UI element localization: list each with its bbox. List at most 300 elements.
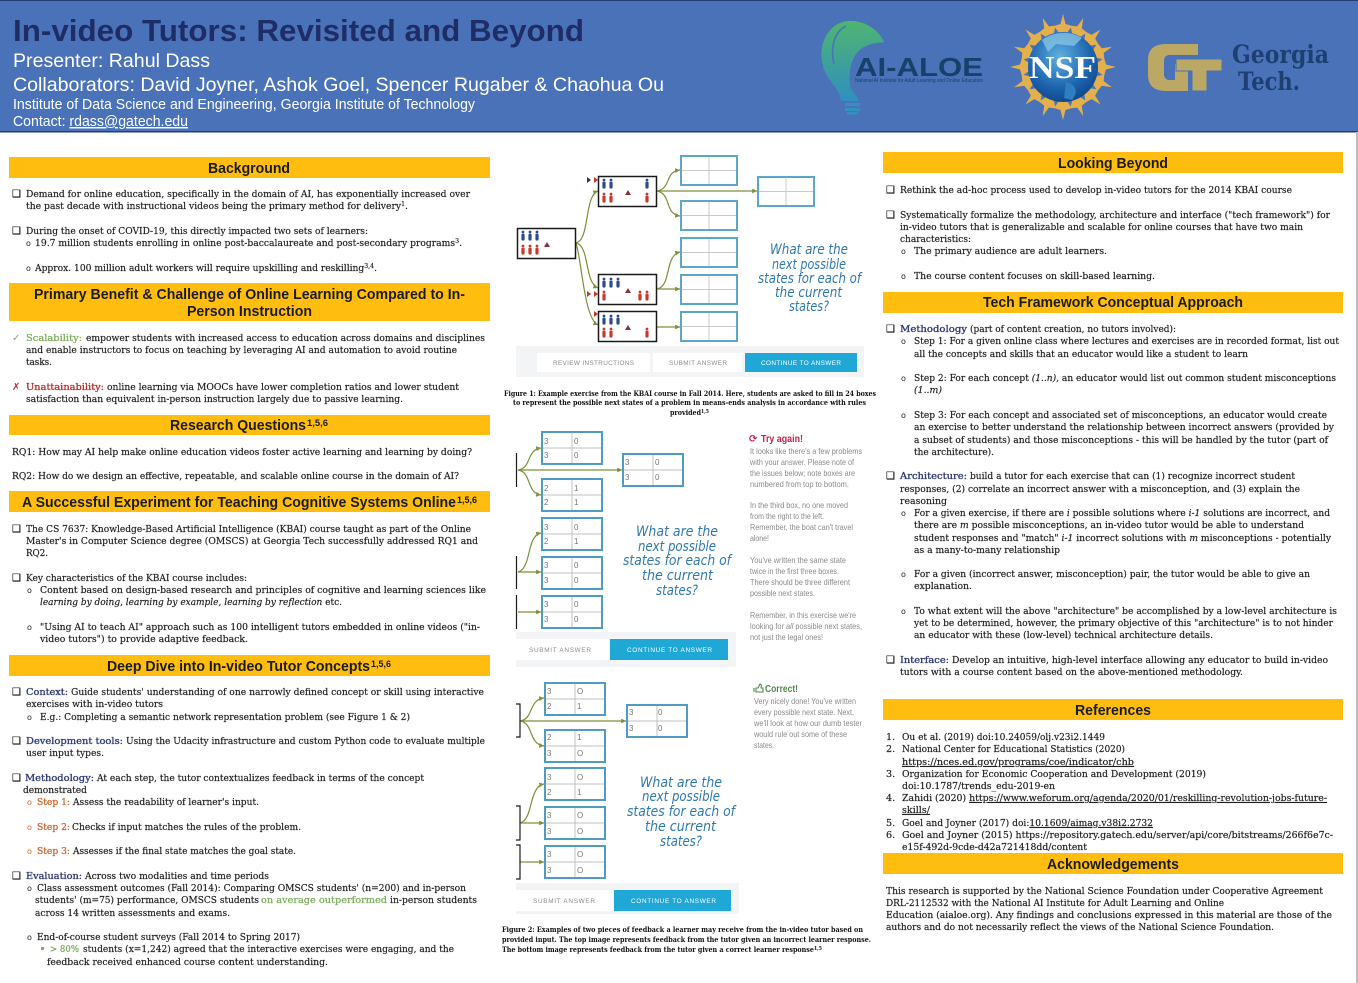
text: background bullets: ❑	[12, 189, 21, 200]
figure 1: KBAI exercise	[504, 156, 876, 417]
heading: research questions	[9, 415, 490, 435]
text: KBAI course: learning by doing, learning by example, learning by reflection etc.	[40, 597, 342, 608]
feedback: try again	[749, 434, 862, 642]
answer boxes with values: 3	[547, 687, 552, 696]
text: architecture: yet to be determined, however, the primary objective of this "architecture" is to not hinder	[913, 618, 1333, 629]
text: references list: Goel and Joyner (2017) doi:10.1609/aimag.v38i2.2732	[902, 818, 1153, 829]
text: methodology: Step 3: For each concept and associated set of misconceptions, an educator would create	[914, 410, 1327, 421]
answer boxes with values: 3	[544, 576, 549, 585]
text: architecture: an educator with these (low-level) technical architecture details.	[914, 630, 1213, 641]
text: methodology: Step 1: For a given online class where lectures and exercises are in recorded format, list out	[914, 336, 1339, 347]
text: looking beyond bullets: characteristics:	[900, 234, 971, 245]
text: references list: skills/	[902, 805, 931, 816]
text: looking beyond bullets: in-video tutors that is generalizable and scalable for online courses that have two main	[900, 222, 1303, 233]
text: methodology: Checks if input matches the rules of the problem.	[72, 822, 301, 833]
text: methodology: ❑	[886, 324, 895, 335]
text: KBAI course: o	[27, 586, 32, 595]
text: context: E.g.: Completing a semantic network representation problem (see Figure 1 & 2)	[40, 712, 410, 723]
text: context: exercises with in-video tutors	[26, 699, 163, 710]
caption: figure 2	[502, 925, 871, 954]
text: scalability: ✓	[12, 333, 20, 344]
handwritten question: the current	[645, 819, 716, 835]
feedback: try again: It looks like there's a few problems	[750, 446, 862, 456]
caption: figure 2: provided input. The top image represents feedback from the tutor given an incorrect learner response.	[502, 935, 871, 944]
text: looking beyond bullets: The primary audience are adult learners.	[914, 246, 1107, 257]
button bar	[516, 632, 736, 667]
feedback: correct: we'll look at how our dumb tester	[753, 718, 862, 728]
handwritten question	[623, 524, 733, 599]
heading: Background	[9, 157, 490, 178]
panel: center figures	[502, 156, 876, 954]
text: architecture: Architecture:	[899, 471, 967, 482]
text: methodology: o	[27, 823, 32, 832]
feedback: correct: Very nicely done! You've written	[754, 696, 856, 706]
logo: Georgia Tech: Tech.	[1238, 67, 1300, 96]
text: architecture: For a given (incorrect answer, misconception) pair, the tutor would be able to give an	[914, 569, 1310, 580]
answer boxes with values: O	[577, 850, 583, 859]
text: KBAI course: Master's in Computer Science degree (OMSCS) at Georgia Tech successfully addressed RQ1 and	[26, 536, 478, 547]
handwritten question: states?	[660, 834, 702, 850]
figure 2: incorrect feedback	[516, 432, 862, 667]
text: methodology: Methodology:	[25, 773, 94, 784]
text: context: o	[27, 713, 32, 722]
text: architecture: reasoning	[900, 496, 947, 507]
answer boxes with values: 3	[544, 437, 549, 446]
feedback: try again: alone!	[750, 533, 769, 543]
answer boxes with values: 3	[544, 561, 549, 570]
feedback: try again: from the right to the left.	[750, 511, 824, 521]
feedback: try again: looking for all possible next states,	[750, 621, 862, 631]
logo: AI-ALOE: National AI Institute for Adult Learning and Online Education	[855, 78, 983, 84]
heading: deep dive	[9, 655, 490, 676]
answer boxes with values: 2	[544, 484, 549, 493]
text: background bullets: 19.7 million students enrolling in online post-baccalaureate and post-secondary programs	[35, 238, 473, 249]
answer boxes with values: O	[577, 687, 583, 696]
text: KBAI course: o	[27, 623, 32, 632]
text: methodology: o	[27, 847, 32, 856]
answer boxes with values: 0	[574, 437, 579, 446]
answer boxes with values	[545, 683, 687, 878]
answer boxes with values: O	[577, 866, 583, 875]
answer boxes with values: 0	[574, 600, 579, 609]
text: architecture: there are m possible misconceptions, an in-video tutor would be able to understand	[914, 520, 1304, 531]
feedback: try again: twice in the first three boxes.	[750, 566, 839, 576]
logo: AI-ALOE: AI-ALOE	[855, 52, 983, 82]
arrows: figure 1 state connections	[576, 170, 757, 327]
heading: Background: Background	[208, 160, 290, 177]
logo: NSF: NSF	[1029, 49, 1096, 85]
answer boxes with values: 1	[577, 788, 582, 797]
feedback: try again: numbered from top to bottom.	[750, 479, 849, 489]
heading: successful experiment: A Successful Experiment for Teaching Cognitive Systems Online	[22, 494, 456, 511]
answer boxes with values: 1	[574, 484, 579, 493]
answer boxes with values: 3	[547, 866, 552, 875]
text: unattainability: ✗	[12, 382, 20, 393]
text: references list: https://nces.ed.gov/programs/coe/indicator/chb	[902, 757, 1134, 768]
text: scalability: and enable instructors to focus on teaching by leveraging AI and automation to avoid routine	[26, 345, 457, 356]
answer boxes with values: 3	[544, 451, 549, 460]
text: looking beyond bullets: o	[901, 272, 906, 281]
text: KBAI course: Content based on design-based research and principles of cognitive and learning sciences like	[40, 585, 486, 596]
text: references list: 6.	[886, 830, 895, 841]
text: looking beyond bullets: Systematically formalize the methodology, architecture and interface ("tech framework") for	[900, 210, 1330, 221]
text: acknowledgements: authors and do not necessarily reflect the views of the National Science Foundation.	[886, 922, 1274, 933]
answer boxes with values: 2	[547, 733, 552, 742]
text: looking beyond bullets: o	[901, 247, 906, 256]
logo: Georgia Tech: Georgia	[1232, 40, 1329, 69]
text: interface: Interface:	[900, 655, 949, 666]
text: architecture: o	[901, 607, 906, 616]
text: references list: 2.	[886, 744, 895, 755]
text: methodology: Step 2: For each concept (1..n), an educator would list out common student misconceptions	[914, 373, 1336, 384]
feedback: try again: the issues below; note boxes are	[750, 468, 855, 478]
text: methodology: o	[27, 798, 32, 807]
people and boat icons	[521, 177, 649, 338]
caption: figure 1: Figure 1: Example exercise from the KBAI course in Fall 2014. Here, students are asked to fill in 24 boxes	[504, 389, 876, 398]
handwritten question: What are the	[636, 524, 718, 540]
state brackets	[516, 704, 520, 879]
text: background bullets: During the onset of COVID-19, this directly impacted two sets of learners:	[26, 226, 368, 237]
handwritten question: the current	[642, 568, 713, 584]
institute: Institute of Data Science and Engineering, Georgia Institute of Technology	[13, 97, 476, 113]
feedback: try again: Try again!	[761, 434, 803, 445]
handwritten question	[627, 775, 737, 850]
text: methodology: a subset of students) and those misconceptions - this will be handled by the tutor (part of	[914, 435, 1329, 446]
heading: research questions: 1,5,6	[307, 418, 328, 428]
answer boxes with values: 3	[625, 458, 630, 467]
text: evaluation: Across two modalities and time periods	[84, 871, 269, 882]
text: references list: Ou et al. (2019) doi:10.24059/olj.v23i2.1449	[902, 732, 1105, 743]
answer boxes with values: 1	[577, 733, 582, 742]
text: development tools: ❑	[12, 736, 21, 747]
text: research questions: RQ1: How may AI help make online education videos foster active learning and learning by doing?	[12, 447, 472, 458]
feedback: correct: Correct!	[765, 684, 798, 695]
button bar: CONTINUE TO ANSWER	[761, 360, 841, 367]
text: evaluation: students' (m=75) performance, OMSCS students	[35, 895, 259, 906]
handwritten question: states for each of	[627, 804, 737, 820]
feedback: try again: Remember, the boat can't travel	[750, 522, 853, 532]
text: background bullets: 3	[455, 237, 459, 245]
text: evaluation: Class assessment outcomes (Fall 2014): Comparing OMSCS students' (n=200) and in-person	[37, 883, 466, 894]
text: looking beyond bullets	[886, 185, 1330, 282]
text: methodology: an exercise to better understand the relationship between incorrect answers (provided by	[914, 422, 1335, 433]
answer boxes with values: 0	[655, 473, 660, 482]
text: methodology: demonstrated	[23, 785, 87, 796]
text: background bullets: ❑	[12, 226, 21, 237]
header banner	[0, 0, 1358, 132]
text: background bullets: .	[374, 263, 377, 274]
text: interface: tutors with a course content based on the above-mentioned methodology.	[900, 667, 1243, 678]
handwritten question: next possible	[642, 789, 720, 805]
answer boxes with values: O	[577, 773, 583, 782]
button bar: SUBMIT ANSWER	[669, 360, 727, 367]
answer boxes with values: O	[577, 749, 583, 758]
handwritten question	[758, 242, 863, 315]
text: references list: e15f-492d-9cde-d42a721418dd/content	[902, 842, 1087, 853]
button bar	[516, 883, 739, 914]
handwritten question: the current	[775, 285, 842, 301]
text: looking beyond bullets: The course content focuses on skill-based learning.	[914, 271, 1155, 282]
text: context: ❑	[12, 687, 21, 698]
text: methodology: Assesses if the final state matches the goal state.	[72, 846, 296, 857]
text: acknowledgements	[886, 886, 1332, 933]
handwritten question: What are the	[640, 775, 722, 791]
text: unattainability: online learning via MOOCs have lower completion ratios and lower student	[107, 382, 459, 393]
heading: deep dive: Deep Dive into In-video Tutor Concepts	[107, 658, 370, 675]
heading: references	[883, 699, 1343, 720]
heading: primary benefit and challenge: Person Instruction	[187, 303, 312, 320]
text: background bullets: o	[26, 239, 31, 248]
text: KBAI course	[12, 524, 486, 645]
heading: looking beyond	[883, 152, 1343, 173]
text: acknowledgements: This research is supported by the National Science Foundation under Cooperative Agreement	[886, 886, 1323, 897]
text: methodology: Step 1:	[37, 797, 70, 808]
text: looking beyond bullets: ❑	[886, 210, 895, 221]
answer boxes with values: O	[577, 811, 583, 820]
text: scalability: empower students with increased access to education across domains and disciplines	[86, 333, 485, 344]
text: methodology: o	[901, 411, 906, 420]
text: architecture	[886, 471, 1337, 641]
text: background bullets: Approx. 100 million adult workers will require upskilling and reskilling	[35, 263, 381, 274]
text: KBAI course: video tutors") to provide adaptive feedback.	[39, 634, 248, 645]
panel: right column	[883, 152, 1343, 933]
text: background bullets: 3,4	[364, 262, 374, 270]
heading: tech framework	[883, 292, 1343, 313]
caption: figure 1: provided	[670, 408, 707, 417]
answer boxes with values: 0	[655, 458, 660, 467]
text: evaluation: feedback received enhanced course content understanding.	[47, 957, 328, 968]
text: methodology: Assess the readability of learner's input.	[72, 797, 259, 808]
answer boxes with values: 0	[658, 724, 663, 733]
presenter: Presenter: Rahul Dass	[13, 50, 210, 72]
handwritten question: states?	[789, 299, 829, 315]
text: interface: Develop an intuitive, high-level interface allowing any educator to build in-video	[952, 655, 1328, 666]
text: development tools: Using the Udacity infrastructure and custom Python code to evaluate multiple	[126, 736, 485, 747]
state boxes	[518, 176, 656, 342]
text: development tools: user input types.	[26, 748, 104, 759]
text: KBAI course: ❑	[12, 524, 21, 535]
feedback: correct	[753, 684, 862, 750]
heading: acknowledgements: Acknowledgements	[1047, 856, 1179, 873]
text: research questions	[12, 447, 472, 482]
heading: successful experiment: 1,5,6	[457, 495, 477, 505]
text: references list: 4.	[886, 793, 895, 804]
feedback: correct: would rule out some of these	[753, 729, 847, 739]
heading: acknowledgements	[883, 853, 1343, 874]
state stubs	[516, 453, 518, 629]
text: architecture: student responses and "match" i-1 incorrect solutions with m misconceptions - potentially	[914, 533, 1332, 544]
answer boxes with values: 3	[547, 749, 552, 758]
text: evaluation: ❑	[12, 871, 21, 882]
text: references list: National Center for Educational Statistics (2020)	[902, 744, 1125, 755]
handwritten question: states for each of	[623, 553, 733, 569]
text: architecture: To what extent will the above "architecture" be accomplished by a low-level architecture is	[914, 606, 1337, 617]
feedback: try again: Remember, in this exercise we're	[750, 610, 856, 620]
logo: AI-ALOE	[821, 21, 983, 114]
text: architecture: build a tutor for each exercise that can (1) recognize incorrect student	[970, 471, 1295, 482]
text: architecture: For a given exercise, if there are i possible solutions where i-1 solutions are incorrect, and	[914, 508, 1330, 519]
text: unattainability	[12, 382, 459, 405]
text: KBAI course: ❑	[12, 573, 21, 584]
text: unattainability: satisfaction than equivalent in-person instruction largely due to passive learning.	[26, 394, 403, 405]
text: research questions: RQ2: How do we design an effective, repeatable, and scalable online course in the domain of AI?	[12, 471, 459, 482]
text: development tools: Development tools:	[26, 736, 123, 747]
answer boxes with values: 3	[547, 773, 552, 782]
text: KBAI course: "Using AI to teach AI" approach such as 100 intelligent tutors embedded in online videos ("in-	[40, 622, 480, 633]
text: background bullets: the past decade with instructional videos being the primary method for delivery	[26, 201, 416, 212]
collaborators: Collaborators: David Joyner, Ashok Goel, Spencer Rugaber & Chaohua Ou	[13, 74, 664, 96]
logo: Georgia Tech	[1148, 40, 1329, 96]
caption: figure 1	[504, 389, 876, 417]
heading: references: References	[1075, 702, 1151, 719]
handwritten question: states?	[656, 583, 698, 599]
text: evaluation: on average outperformed	[261, 895, 387, 906]
answer boxes with values: 3	[547, 811, 552, 820]
text: methodology: ❑	[12, 773, 21, 784]
text: methodology: (part of content creation, no tutors involved):	[970, 324, 1176, 335]
text: evaluation: Evaluation:	[26, 871, 82, 882]
text: unattainability: Unattainability:	[26, 382, 104, 393]
answer boxes with values: 3	[544, 615, 549, 624]
text: evaluation: across 14 written assessments and exams.	[35, 908, 230, 919]
text: scalability: tasks.	[26, 357, 52, 368]
handwritten question: What are the	[770, 242, 848, 258]
text: methodology: all the concepts and skills that an educator would like a student to learn	[914, 349, 1248, 360]
caption: figure 1: to represent the possible next states of a problem in means-ends analysis in accordance with rules	[513, 398, 866, 407]
text: evaluation: o	[27, 933, 32, 942]
text: background bullets: o	[26, 264, 31, 273]
answer boxes with values: 1	[574, 498, 579, 507]
feedback: try again: not just the legal ones!	[750, 632, 823, 642]
title: In-video Tutors: Revisited and Beyond	[13, 13, 584, 48]
text: references list: 1.	[886, 732, 895, 743]
text: looking beyond bullets: ❑	[886, 185, 895, 196]
caption: figure 1: 1,5	[701, 409, 709, 415]
text: background bullets: .	[405, 201, 408, 212]
text: looking beyond bullets: Rethink the ad-hoc process used to develop in-video tutors for the 2014 KBAI course	[900, 185, 1292, 196]
heading: deep dive: 1,5,6	[371, 659, 391, 669]
handwritten question: next possible	[638, 539, 716, 555]
text: methodology: the architecture).	[914, 447, 994, 458]
feedback: try again: with your answer. Please note of	[749, 457, 855, 467]
text: architecture: o	[901, 570, 906, 579]
answer boxes with values: 2	[547, 788, 552, 797]
text: evaluation: End-of-course student surveys (Fall 2014 to Spring 2017)	[37, 932, 300, 943]
text: references list: doi:10.1787/trends_edu-2019-en	[902, 781, 1055, 792]
text: context	[12, 687, 484, 723]
heading: tech framework: Tech Framework Conceptual Approach	[983, 294, 1243, 311]
text: background bullets: .	[459, 238, 462, 249]
text: architecture: responses, (2) correlate an incorrect answer with a misconception, and (3) explain the	[900, 484, 1300, 495]
text: context: Guide students' understanding of one narrowly defined concept or skill using interactive	[71, 687, 484, 698]
logo: NSF	[1010, 14, 1116, 120]
answer boxes with values: O	[577, 827, 583, 836]
caption: figure 2: Figure 2: Examples of two pieces of feedback a learner may receive from the in-video tutor based on	[502, 925, 863, 934]
text: background bullets: Demand for online education, specifically in the domain of AI, has exponentially increased over	[26, 189, 470, 200]
answer boxes with values: 0	[574, 561, 579, 570]
text: methodology: (1..m)	[914, 385, 942, 396]
feedback: try again: There should be three different	[750, 577, 851, 587]
text: methodology	[12, 773, 424, 857]
button bar: SUBMIT ANSWER	[533, 898, 595, 905]
answer boxes with values: 3	[544, 600, 549, 609]
caption: figure 2: 1,5	[814, 946, 822, 952]
text: methodology: o	[901, 374, 906, 383]
answer boxes with values	[542, 432, 683, 628]
answer boxes with values: 2	[547, 702, 552, 711]
feedback: try again: possible next states.	[750, 588, 815, 598]
feedback: try again: You've written the same state	[750, 555, 846, 565]
heading: research questions: Research Questions	[170, 417, 306, 434]
text: acknowledgements: DRL-2112532 with the National AI Institute for Adult Learning and Online	[886, 898, 1224, 909]
text: architecture: explanation.	[914, 581, 972, 592]
answer boxes with values: 0	[658, 708, 663, 717]
answer boxes with values: 3	[547, 850, 552, 859]
text: methodology: Step 3:	[37, 846, 70, 857]
heading: primary benefit and challenge: Primary Benefit & Challenge of Online Learning Compared to In-	[34, 286, 465, 303]
heading: primary benefit and challenge	[9, 283, 490, 321]
button bar: CONTINUE TO ANSWER	[627, 647, 712, 654]
text: background bullets	[12, 189, 470, 274]
figure 2: correct feedback	[502, 683, 871, 954]
text: evaluation: in-person students	[390, 895, 477, 906]
handwritten question: next possible	[772, 257, 846, 273]
text: background bullets: 1	[401, 200, 405, 208]
text: architecture: ❑	[886, 471, 895, 482]
answer boxes with values: 3	[629, 708, 634, 717]
answer boxes with values: 1	[574, 537, 579, 546]
text: methodology: o	[901, 337, 906, 346]
heading: looking beyond: Looking Beyond	[1058, 155, 1168, 172]
answer boxes with values: 0	[574, 523, 579, 532]
button bar	[516, 346, 864, 377]
handwritten question: states for each of	[758, 271, 863, 287]
text: evaluation: students (x=1,242) agreed that the interactive exercises were engaging, and the	[83, 944, 454, 955]
answer boxes with values: 0	[574, 615, 579, 624]
arrows: correct response	[520, 698, 626, 862]
text: architecture: o	[901, 509, 906, 518]
text: context: Context:	[26, 687, 68, 698]
answer boxes with values: 0	[574, 576, 579, 585]
feedback: correct: states.	[754, 740, 774, 750]
text: methodology: Methodology	[900, 324, 968, 335]
answer boxes with values: 3	[629, 724, 634, 733]
answer boxes with values: 1	[577, 702, 582, 711]
text: interface: ❑	[886, 655, 895, 666]
answer boxes with values: 2	[544, 537, 549, 546]
panel: left column	[9, 157, 490, 968]
text: scalability: Scalability:	[26, 333, 82, 344]
contact: Contact: rdass@gatech.edu	[13, 114, 188, 130]
feedback: try again: ⟳	[749, 434, 758, 445]
text: methodology: Step 2:	[37, 822, 70, 833]
text: methodology	[886, 324, 1339, 458]
text: scalability	[12, 333, 485, 368]
arrows: incorrect response	[518, 448, 622, 612]
text: development tools	[12, 736, 485, 759]
button bar: CONTINUE TO ANSWER	[631, 898, 716, 905]
text: KBAI course: RQ2.	[26, 548, 48, 559]
text: references list: Zahidi (2020) https://www.weforum.org/agenda/2020/01/reskilling-revolution-jobs-future-	[902, 793, 1327, 804]
feedback: correct: every possible next state. Next,	[754, 707, 854, 717]
text: KBAI course: The CS 7637: Knowledge-Based Artificial Intelligence (KBAI) course taught as part of the Online	[26, 524, 471, 535]
caption: figure 2: The bottom image represents feedback from the tutor given a correct learner response	[502, 945, 873, 954]
text: architecture: as a many-to-many relationship	[914, 545, 1060, 556]
text: KBAI course: Key characteristics of the KBAI course includes:	[26, 573, 247, 584]
answer boxes with values: 3	[625, 473, 630, 482]
button bar: SUBMIT ANSWER	[529, 647, 591, 654]
text: references list	[886, 732, 1333, 853]
